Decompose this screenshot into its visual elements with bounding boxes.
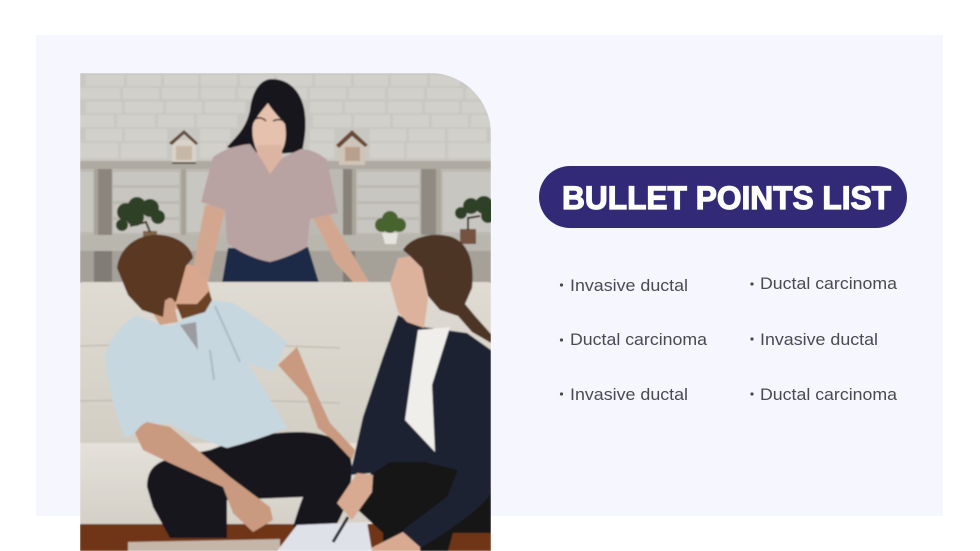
plant right <box>455 196 495 244</box>
photo: three people meeting on a sofa <box>80 73 495 551</box>
bullet: row 3 left: Invasive ductal <box>570 385 688 404</box>
bullet: row 1 left: Invasive ductal <box>570 276 688 295</box>
bullet: row 2 right: Invasive ductal <box>760 330 878 349</box>
birdhouse right <box>336 130 368 165</box>
sofa <box>80 282 491 551</box>
papers and pen <box>277 517 372 551</box>
plant middle <box>375 211 406 244</box>
brick wall <box>80 73 491 236</box>
birdhouse left <box>169 130 198 164</box>
bullet: row 3 right: Ductal carcinoma <box>760 385 898 404</box>
bullet: row 1 right: Ductal carcinoma <box>760 274 898 293</box>
table <box>128 539 280 551</box>
plant left <box>116 197 165 241</box>
shelf <box>80 161 491 283</box>
heading text: BULLET POINTS LIST <box>562 180 891 216</box>
seated woman <box>337 235 491 551</box>
heading pill <box>539 166 907 228</box>
seated man <box>105 235 355 538</box>
bullet: row 2 left: Ductal carcinoma <box>570 330 708 349</box>
bullet list <box>560 274 898 404</box>
standing woman <box>193 79 369 283</box>
